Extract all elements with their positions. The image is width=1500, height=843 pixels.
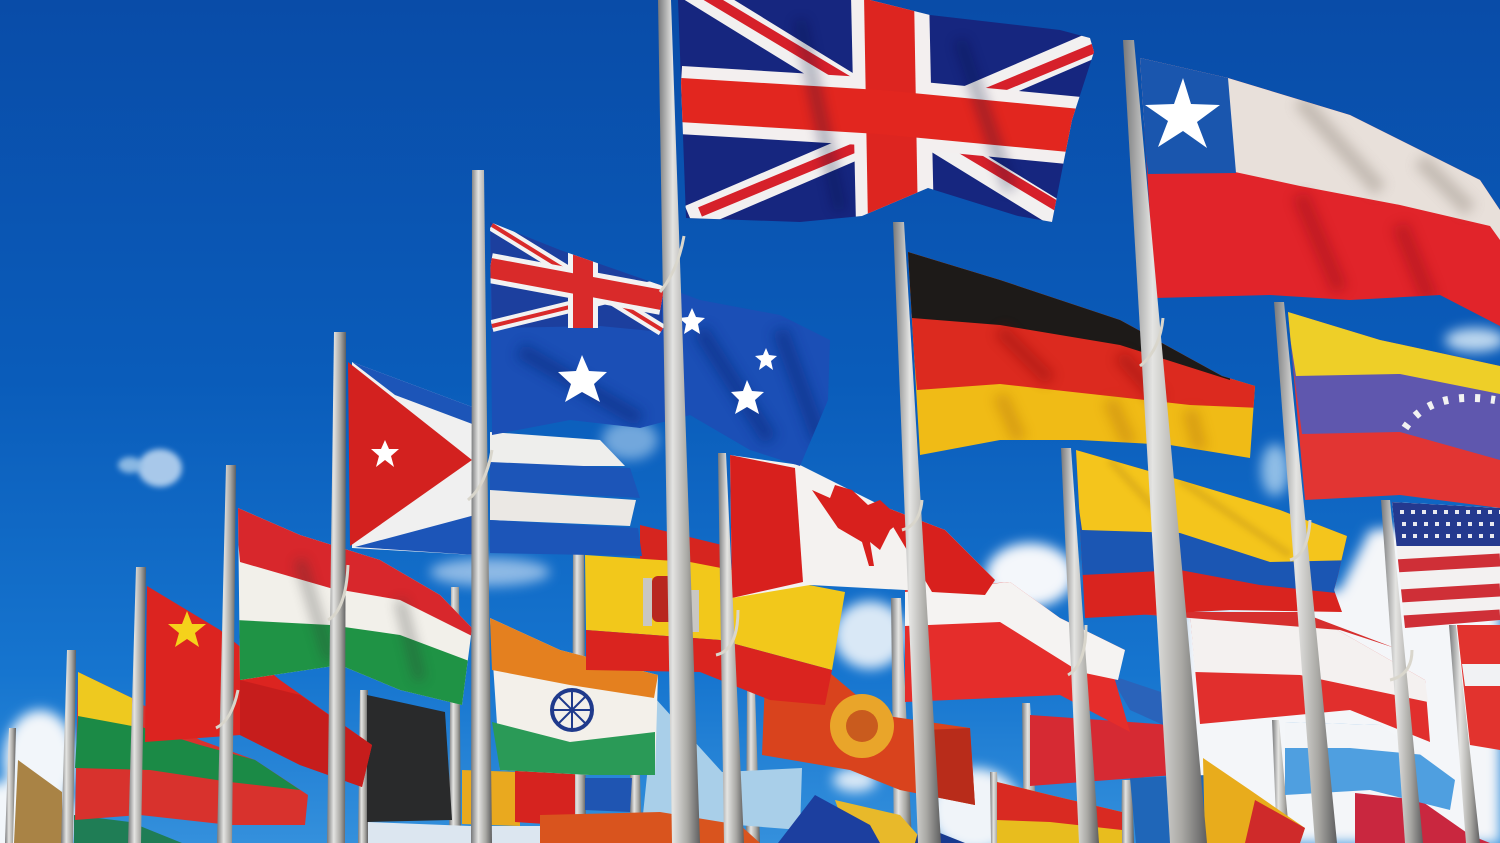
flag: red band behind white red flag xyxy=(1030,715,1175,786)
icon: small star xyxy=(755,348,777,370)
flag: bottom right red xyxy=(1355,793,1490,843)
flag: red tip xyxy=(1245,800,1305,843)
flag: China xyxy=(145,586,372,787)
flag: USA xyxy=(1390,500,1500,630)
rope loops on poles xyxy=(216,236,1412,728)
pole: centre left xyxy=(471,170,492,843)
cloud: large right bank xyxy=(1180,328,1500,843)
back poles xyxy=(5,545,1290,843)
flag: Hungary xyxy=(235,505,480,710)
white diagonals xyxy=(690,0,1100,222)
flag: white red right xyxy=(1110,612,1430,742)
flag: bottom left brown xyxy=(14,760,62,843)
flag: yellow strip xyxy=(462,770,520,826)
pole: left 2 xyxy=(128,567,146,843)
flag: Lithuania xyxy=(75,672,308,825)
flag: white-blue bottom xyxy=(368,822,540,843)
icon: large star xyxy=(558,355,607,402)
flag: Cuba xyxy=(348,362,642,556)
pole: main xyxy=(658,0,700,843)
flag: blue fragment xyxy=(1110,675,1170,728)
icon: arc of stars xyxy=(1405,398,1495,428)
flag: orange strip xyxy=(540,812,760,843)
flag: navy far bottom xyxy=(915,825,965,843)
cloud: centre wisp xyxy=(430,420,658,586)
icon: maple leaf xyxy=(812,485,902,566)
cloud: small left puff xyxy=(118,449,182,487)
pole: left 3 xyxy=(217,465,236,843)
red diagonals xyxy=(700,0,1095,214)
icon: upper star xyxy=(679,308,705,334)
flag: far right red xyxy=(1457,625,1500,750)
white cross xyxy=(890,0,895,225)
flag: Australia xyxy=(485,215,835,470)
icon: yellow star xyxy=(168,611,206,647)
clouds xyxy=(0,328,1500,843)
flag: Union Jack xyxy=(675,0,1100,225)
icon: white star xyxy=(1145,78,1220,148)
cloud: centre bottom xyxy=(833,543,1074,843)
cloud: lower left xyxy=(0,710,80,843)
flag: Venezuela xyxy=(1285,305,1500,515)
flag: bottom left green xyxy=(74,815,182,843)
canton: Union Jack xyxy=(490,222,662,332)
flag: India xyxy=(490,618,658,775)
pole: Colombia xyxy=(1061,448,1099,843)
pole: Germany xyxy=(893,222,941,843)
red cross xyxy=(889,0,893,225)
pole: Chile xyxy=(1123,40,1207,843)
flag: blue bottom right xyxy=(1285,722,1455,810)
pole: far left xyxy=(61,650,76,843)
flag: bottom yellow xyxy=(835,800,925,843)
icon: right star xyxy=(731,380,764,414)
flag: pale blue xyxy=(642,698,802,830)
flag: red yellow bottom xyxy=(997,782,1122,843)
flag: Spain xyxy=(585,525,845,705)
icon: coat of arms xyxy=(643,576,699,632)
flag: Germany xyxy=(905,250,1260,460)
icon: chakra wheel xyxy=(552,690,592,730)
flag: Canada xyxy=(730,455,995,598)
flag: gold bottom xyxy=(1203,758,1305,843)
flag: red strip xyxy=(515,768,575,826)
flag: Kyrgyzstan xyxy=(762,673,975,805)
pole: Canada xyxy=(718,453,744,843)
pole: far right xyxy=(1449,625,1480,843)
flag: white red centre right xyxy=(905,582,1130,732)
pole: Venezuela xyxy=(1274,302,1337,843)
icon: stars xyxy=(1400,512,1500,536)
flag: bottom blue stars xyxy=(778,795,880,843)
flag: blue bottom xyxy=(1130,775,1210,843)
flag: Chile xyxy=(1135,50,1500,330)
icon: white star xyxy=(371,440,399,467)
flag: dark bottom left of centre xyxy=(367,695,452,822)
pole: USA xyxy=(1381,500,1423,843)
flags: far bottom row xyxy=(14,625,1500,843)
flag: blue strip xyxy=(585,778,632,812)
flag: Colombia xyxy=(1076,450,1347,618)
pole: left 4 xyxy=(327,332,346,843)
